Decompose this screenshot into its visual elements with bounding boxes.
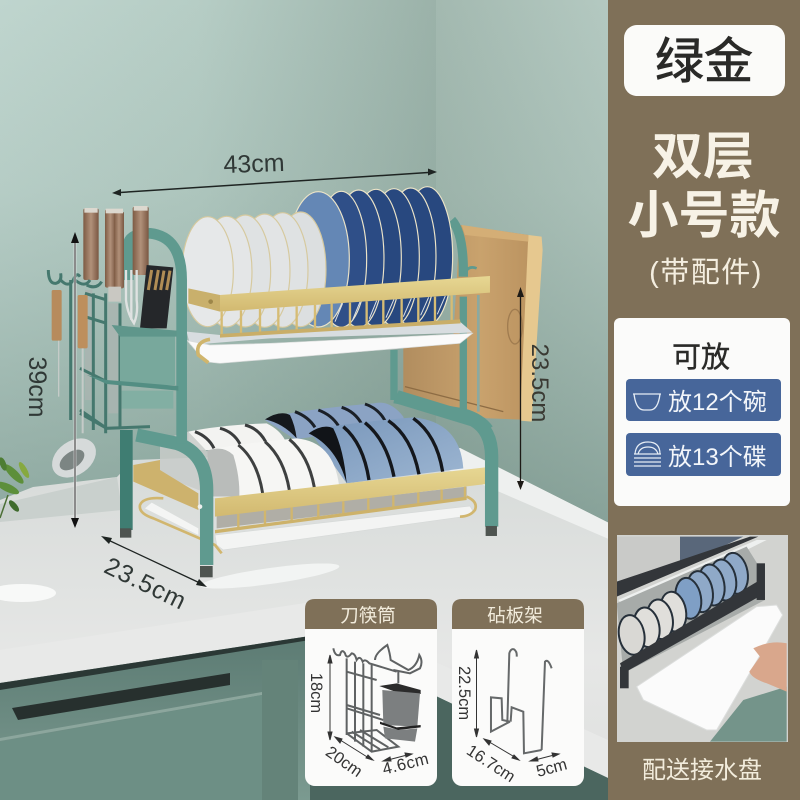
right rack frame	[394, 220, 490, 428]
capacity: 12 bowls: 放12个碗	[668, 389, 767, 416]
dimension: 23.5cm board height	[517, 287, 553, 490]
lower tier scene	[120, 397, 497, 577]
caption: 配送接水盘: 配送接水盘	[642, 757, 762, 784]
rack feet	[120, 526, 497, 577]
dimension: 23.5cm depth	[100, 536, 207, 616]
board holder line drawing	[491, 649, 552, 753]
capacity: 13 plates: 放13个碟	[668, 444, 767, 471]
holder dimensions	[328, 655, 412, 761]
subheading: 带配件: (带配件)	[649, 256, 763, 289]
dimension: 39cm height: 39cm	[23, 356, 51, 418]
green cutlery cup	[87, 325, 178, 409]
accessory card: cutting board holder	[452, 599, 584, 786]
knife holder line drawing	[333, 645, 422, 752]
board holder labels: 16.7cm	[463, 742, 518, 786]
upper tier scene	[182, 187, 543, 428]
board holder dimensions	[474, 650, 559, 761]
heading: 双层 小号款: 小号款	[627, 187, 781, 244]
frame bolts	[198, 504, 202, 509]
knife handles	[83, 206, 149, 302]
capacity: 13 plates	[626, 433, 781, 476]
dimension: 23.5cm depth: 23.5cm	[100, 552, 191, 616]
dimension: 39cm height	[23, 232, 79, 528]
cutting board	[403, 225, 543, 422]
photo: drip tray in use	[616, 535, 788, 742]
background: green kitchen wall	[0, 0, 611, 540]
tray	[145, 503, 473, 550]
dimension: 43cm width	[112, 149, 437, 196]
capacity: 12 bowls	[626, 379, 781, 421]
photo: white tray	[637, 605, 783, 730]
accessory card: knife holder: 刀筷筒	[340, 605, 396, 626]
drip tray	[187, 322, 473, 363]
rear white bowls	[188, 423, 285, 450]
photo: upper plates	[617, 537, 767, 673]
photo: cabinet	[710, 687, 787, 742]
chopsticks and fork	[126, 265, 173, 328]
rear blue bowls	[265, 403, 405, 439]
accessory card: cutting board holder: 砧板架	[487, 605, 543, 626]
knife holder cup	[379, 683, 421, 742]
board holder labels: 22.5cm	[455, 666, 473, 720]
photo: bowls	[616, 551, 751, 657]
green lower cabinet with black handle	[0, 636, 608, 800]
hanging utensils	[52, 290, 88, 433]
plant	[0, 456, 31, 518]
board holder labels	[455, 666, 569, 786]
colour label: 绿金	[624, 25, 785, 96]
gold basket	[133, 460, 492, 553]
front white bowls	[207, 438, 339, 497]
left translucent side of bowls	[160, 432, 207, 493]
marble counter and backsplash	[0, 448, 611, 800]
holder labels: 20cm	[322, 743, 366, 781]
capacity panel: 可放	[672, 341, 730, 374]
white plates	[182, 212, 326, 327]
green frame arches	[137, 397, 492, 565]
accessory card: knife holder	[305, 599, 437, 786]
arch of upper frame	[128, 233, 182, 443]
dimension: 23.5cm board height: 23.5cm	[526, 344, 553, 422]
board holder labels: 5cm	[534, 755, 569, 781]
photo: lower rack bar	[620, 563, 765, 688]
spoon head	[45, 430, 103, 486]
heading: 双层 小号款: 双层	[652, 128, 754, 185]
frame wires and hooks	[48, 270, 150, 433]
dimension: 43cm width: 43cm	[223, 149, 285, 179]
knife blades	[85, 290, 118, 413]
capacity panel	[614, 318, 790, 506]
sidebar	[608, 0, 800, 800]
colour label: 绿金: 绿金	[655, 35, 753, 89]
blue plates	[287, 187, 453, 327]
heading: 双层 小号款	[627, 128, 781, 244]
photo: hand	[749, 642, 787, 692]
holder labels	[307, 673, 431, 781]
holder labels: 4.6cm	[381, 750, 431, 779]
knife and utensil holder	[48, 206, 182, 443]
gold basket	[188, 276, 490, 363]
back left leg	[120, 430, 133, 530]
front blue bowls	[309, 417, 463, 483]
holder labels: 18cm	[307, 673, 325, 713]
